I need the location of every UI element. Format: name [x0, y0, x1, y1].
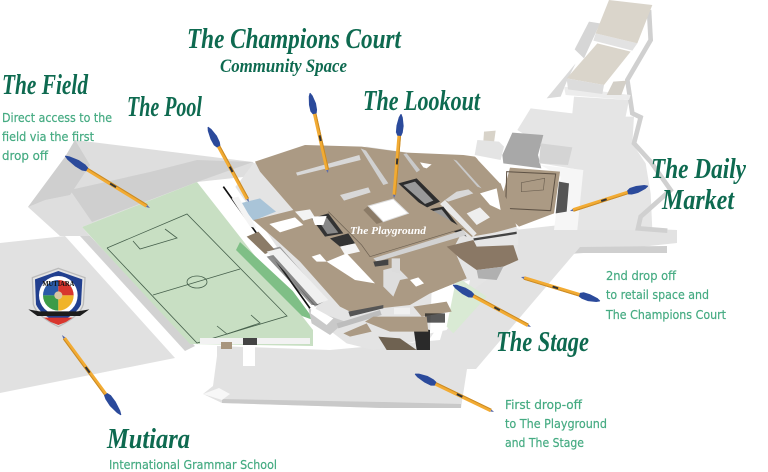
pen pointer: Mutiara: [59, 333, 124, 417]
north-east grey site and upper roofs: [475, 0, 671, 231]
south roofs: [383, 267, 413, 297]
pen pointer: 2nd drop off: [520, 274, 601, 304]
text: field access note: drop off: [2, 149, 49, 163]
heading: The Lookout: The Lookout: [363, 86, 481, 117]
roof mass: [253, 145, 517, 312]
east octagon terrace: [447, 240, 518, 270]
text: field access note: [2, 111, 112, 163]
green playing field: [82, 182, 313, 366]
right hipped roof: [499, 168, 560, 227]
beige middle roof: [567, 43, 631, 85]
heading: The Field: The Field: [2, 70, 89, 101]
text: first drop-off note: First drop-off: [505, 398, 583, 412]
grey terrain: west slope and car park: [0, 140, 677, 408]
pen pointer: The Field: [63, 153, 152, 211]
text: first drop-off note: and The Stage: [505, 436, 584, 450]
pen pointer: The Daily Market: [569, 183, 649, 214]
text: field access note: field via the first: [2, 130, 94, 144]
pen pointer: The Pool: [205, 125, 252, 204]
pool: [240, 198, 276, 221]
west roofs: [269, 217, 303, 232]
skylight: [368, 199, 408, 222]
text: field access note: Direct access to the: [2, 111, 112, 125]
text: International Grammar School: International Grammar School: [109, 458, 277, 472]
text: second drop-off note: to retail space and: [606, 288, 709, 302]
heading: The Daily Market: Market: [661, 185, 735, 216]
subheading: Community Space: Community Space: [220, 56, 347, 77]
roof strips and light walls: [296, 155, 361, 176]
beige upper roof: [596, 0, 652, 43]
central playground roof: [328, 192, 463, 257]
pen pointer: The Stage: [451, 282, 533, 330]
heading: The Champions Court: The Champions Court: [187, 24, 402, 55]
dark courtyards: [398, 178, 440, 208]
text: first drop-off note: [505, 398, 607, 450]
text: second drop-off note: The Champions Court: [605, 308, 726, 322]
heading: The Stage: The Stage: [496, 327, 589, 358]
text: second drop-off note: [605, 269, 726, 322]
logo: Mutiara crest: [28, 268, 89, 327]
grey metal roof building: [502, 133, 543, 168]
text: second drop-off note: 2nd drop off: [606, 269, 677, 283]
logo: Mutiara crest: MUTIARA: [42, 279, 75, 288]
pen pointer: first drop-off: [413, 371, 496, 415]
pen pointer: The Lookout: [390, 114, 405, 198]
heading: The Daily Market: [651, 154, 746, 216]
heading: The Pool: The Pool: [127, 92, 202, 123]
pen pointer: The Champions Court: [306, 92, 332, 174]
title on roof: The Playground: The Playground: [350, 225, 427, 237]
main school building: [220, 145, 518, 350]
heading: Mutiara: Mutiara: [106, 424, 190, 455]
text: first drop-off note: to The Playground: [505, 417, 607, 431]
heading: The Daily Market: The Daily: [651, 154, 746, 185]
